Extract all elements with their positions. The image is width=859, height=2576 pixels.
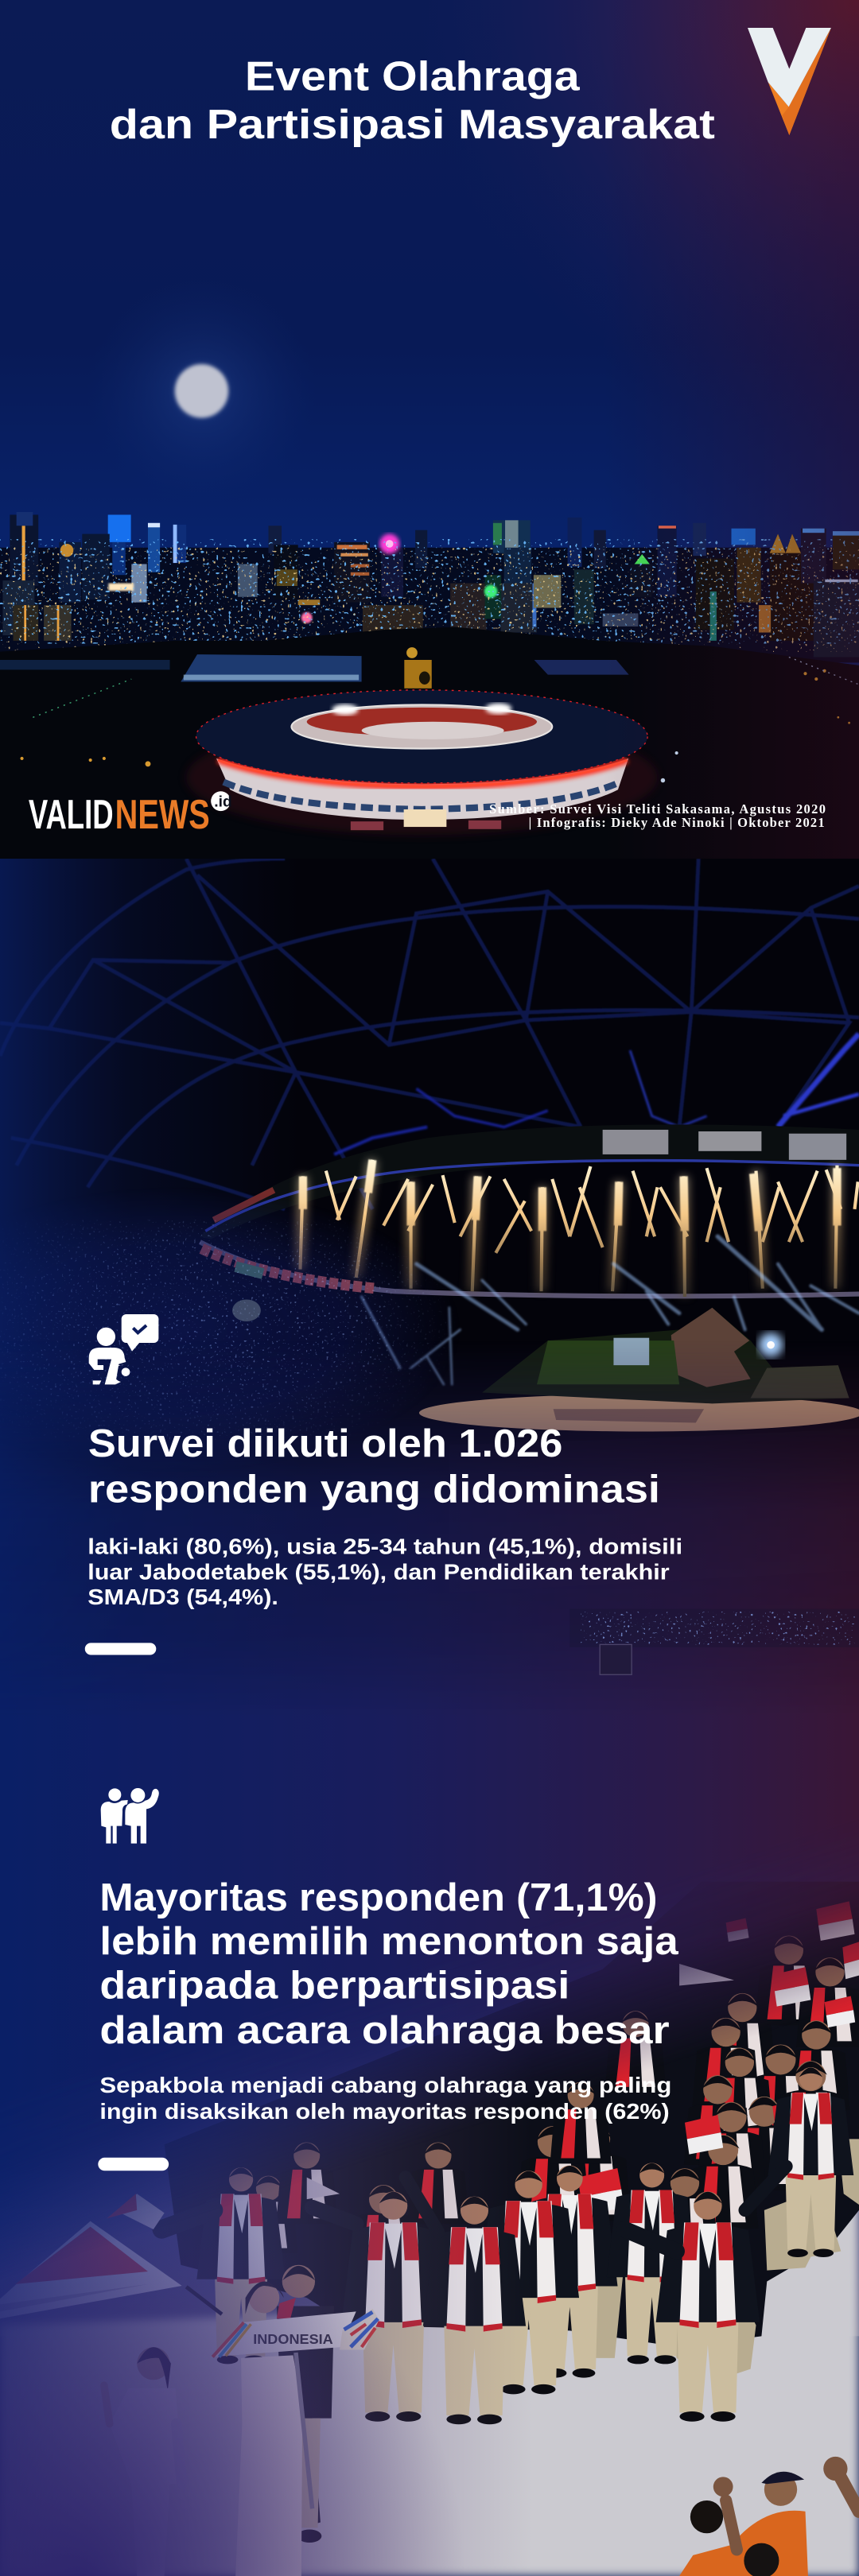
- indonesia sign: INDONESIA: [253, 2331, 333, 2347]
- body text: respondent profile: SMA/D3 (54,4%).: [87, 1585, 278, 1609]
- top navy purple overlay: [0, 1717, 859, 2576]
- night sky background: [0, 410, 859, 665]
- spectator crowd lights: [0, 1187, 548, 1472]
- dark field band behind parade: [0, 1717, 859, 2336]
- lower seating crowd: [569, 1609, 859, 1674]
- dark park foreground: [0, 627, 859, 859]
- raised arms: [161, 2167, 786, 2252]
- orange shirt spectators: [679, 2457, 859, 2576]
- indonesia sign: [211, 2309, 379, 2357]
- accent bar: [85, 1643, 156, 1655]
- far right trousers: [575, 2139, 859, 2375]
- title: [110, 54, 715, 148]
- body text: respondent profile: luar Jabodetabek (55,1%), dan Pendidikan terakhir: [87, 1559, 670, 1584]
- fireworks: [300, 1160, 858, 1297]
- athletes marching: [196, 2067, 853, 2424]
- body text: football: Sepakbola menjadi cabang olahraga yang paling: [99, 2073, 671, 2097]
- bottom navy purple overlay: [0, 1340, 859, 1717]
- icon: respondent with speech bubble: [89, 1314, 158, 1384]
- icon: V logo: [748, 28, 831, 135]
- icon: two people waving: [101, 1788, 159, 1844]
- purple corner overlay: [525, 0, 859, 310]
- title: Event Olahraga: [245, 54, 581, 100]
- title: dan Partisipasi Masyarakat: [110, 102, 715, 148]
- stage light beams: [362, 1236, 859, 1384]
- flag ring: [200, 1242, 859, 1296]
- heading: survey: [88, 1421, 660, 1511]
- woman in white center: [235, 2281, 302, 2576]
- red and white flags: [307, 1901, 859, 2216]
- panel: survey respondents: [0, 859, 859, 1717]
- stadium interior background: [0, 859, 859, 1717]
- left navy wash on photo: [0, 1717, 859, 2576]
- seating tiers: [449, 1428, 859, 1593]
- man behind sign: [277, 2265, 334, 2543]
- panel: spectators versus participants: [0, 1717, 859, 2576]
- body text: respondent profile: [87, 1534, 682, 1609]
- rock and waterfall stage: [419, 1308, 859, 1431]
- moon glow: [138, 324, 266, 450]
- heading: majority prefers watching: Mayoritas responden (71,1%): [99, 1875, 658, 1919]
- parade crowd mass: [165, 1882, 859, 2347]
- heading: majority prefers watching: dalam acara olahraga besar: [99, 2008, 670, 2052]
- city lights: [0, 539, 859, 652]
- body text: football: [99, 2073, 671, 2124]
- bottom purple wash: [0, 2210, 859, 2576]
- heading: majority prefers watching: [99, 1875, 678, 2052]
- source credit: [490, 804, 826, 830]
- city skyline: [0, 512, 859, 662]
- right edge maroon tint: [628, 0, 859, 859]
- validnews wordmark: NEWS: [115, 792, 210, 838]
- rear rows of athletes: [239, 1936, 859, 2275]
- center emblem: [232, 1299, 261, 1321]
- low buildings beside stadium: [0, 647, 629, 689]
- source credit: | Infografis: Dieky Ade Ninoki | Oktober 2021: [529, 815, 825, 830]
- accent bar: [98, 2158, 169, 2171]
- sign pole: [296, 2353, 313, 2508]
- heading: survey: Survei diikuti oleh 1.026: [88, 1421, 562, 1465]
- body text: respondent profile: laki-laki (80,6%), usia 25-34 tahun (45,1%), domisili: [87, 1534, 682, 1559]
- source credit: Sumber: Survei Visi Teliti Sakasama, Agustus 2020: [489, 801, 826, 817]
- white flag bearer with pole: [0, 2194, 222, 2318]
- scattered park lights: [20, 658, 859, 782]
- validnews wordmark: .id: [214, 794, 232, 811]
- parade floor photo base: [0, 2199, 859, 2576]
- body text: football: ingin disaksikan oleh mayoritas responden (62%): [99, 2099, 670, 2124]
- roof lattice: [0, 859, 859, 1209]
- full moon: [175, 364, 228, 418]
- ring canopy with banners: [200, 1124, 859, 1240]
- left blue gradient overlay: [0, 859, 859, 1717]
- woman in white left: [104, 2347, 184, 2576]
- heading: survey: responden yang didominasi: [88, 1466, 660, 1511]
- heading: majority prefers watching: daripada berpartisipasi: [99, 1962, 569, 2007]
- validnews wordmark: [29, 791, 231, 828]
- stadium: [186, 690, 658, 835]
- heading: majority prefers watching: lebih memilih menonton saja: [99, 1918, 678, 1963]
- blue lit roof structure: [334, 1034, 859, 1154]
- validnews wordmark: VALID: [29, 792, 114, 838]
- panel: stadium skyline hero: [0, 0, 859, 859]
